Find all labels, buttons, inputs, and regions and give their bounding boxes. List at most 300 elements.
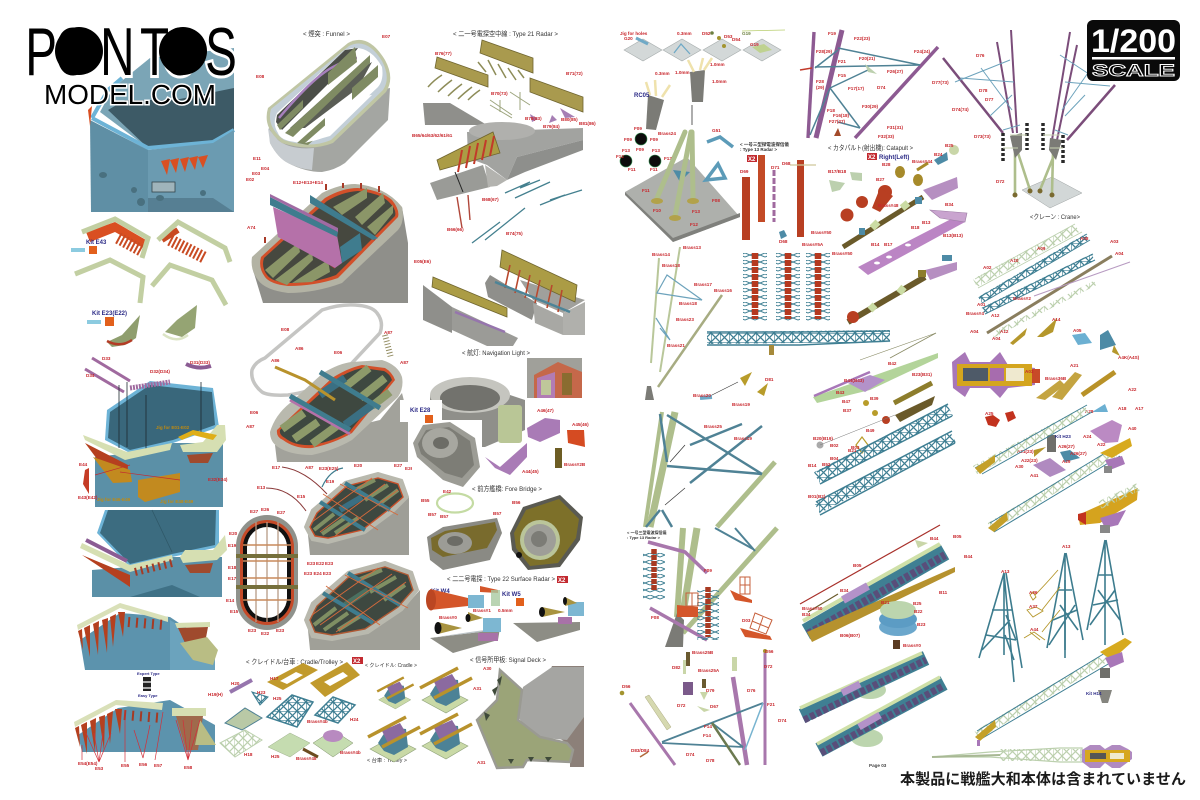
text: cradle and trolley sub labels: < クレイドル: Cradle > [365, 663, 417, 669]
funnel 4: E23 [325, 561, 334, 566]
badge: x2 cradle [352, 657, 363, 665]
panel: central truss pieces: B20(B19) [813, 436, 833, 441]
panel: fore bridge parts: B56 [512, 500, 521, 505]
panel: catapult rail with disk [800, 525, 973, 649]
panel: top centre mast lattice: F27(27) [829, 119, 846, 124]
panel: brass pieces: Brass18 [662, 263, 680, 268]
panel: crane complete lower [975, 638, 1132, 746]
panel: top centre mast lattice: F24(24) [914, 49, 931, 54]
panel: central truss pieces: B39 [870, 396, 879, 401]
panel: crane assembly parts mid [985, 404, 1144, 478]
panel: tripod with tapered parts: 0.3mm [655, 71, 670, 76]
panel: top centre mast lattice: F32(33) [878, 134, 895, 139]
panel: signal deck: A31 [477, 760, 486, 765]
panel: bridge underside labelled: E55 [121, 763, 130, 768]
panel: crane assembly parts mid: A22(23) [1021, 458, 1038, 463]
panel: top centre mast lattice: F15 [838, 73, 846, 78]
panel: crane assembly parts mid: A40 [1128, 426, 1137, 431]
panel: crane boom parts: A10 [1010, 258, 1019, 263]
funnel 3: with plates: E06 [250, 410, 259, 415]
funnel wire labels and arrows: E20 [354, 463, 363, 468]
panel: crane plan view [932, 745, 1132, 768]
panel: catapult rail with disk: B05 [853, 563, 862, 568]
panel: signal deck: A31 [473, 686, 482, 691]
badge: x2 cradle: X2 [353, 659, 361, 665]
panel: type 13 radar parts: D69 [740, 169, 749, 174]
panel: funnel grid plan view: E15 [230, 609, 239, 614]
panel: tripod with tapered parts: F12 [690, 222, 698, 227]
panel: mast lattice large: Brass19 [734, 436, 752, 441]
panel: top centre mast lattice: F19 [828, 31, 836, 36]
panel: bridge assembly with jigs: E43(E42) [78, 495, 98, 500]
panel: crane boom parts: A02 [983, 265, 992, 270]
panel: crane assembly parts mid: A25 [985, 411, 994, 416]
panel: central truss pieces: B02 [830, 443, 839, 448]
panel: crane assembly parts mid: Kit H23 [1055, 434, 1071, 439]
panel: crane boom parts: A05 [1073, 328, 1082, 333]
panel: cradle parts: H25 [273, 696, 282, 701]
panel: tripod with tapered parts: F11 [642, 188, 650, 193]
funnel 2 labels: E04 [261, 166, 270, 171]
panel: tripod with tapered parts: F13 [692, 209, 700, 214]
funnel wire labels and arrows: E27 [394, 463, 403, 468]
panel: crane assembly parts mid: A26(27) [1070, 451, 1087, 456]
funnel ring and ladder: E06 [334, 350, 343, 355]
panel: lower mast parts: D76 [747, 688, 756, 693]
panel: type 22 radar parts: Brass#0 [439, 615, 457, 620]
panel: crane base plan parts: A03 [1025, 369, 1034, 374]
panel: tripod with tapered parts: 1.0mm [712, 79, 727, 84]
panel: tripod with tapered parts: F13 [652, 148, 660, 153]
panel: type 21 radar parts: B78(83) [525, 116, 542, 121]
funnel 1 labels [253, 34, 391, 161]
panel: tripod with tapered parts: RC05 [634, 93, 650, 99]
panel: cradle parts: H18 [244, 752, 253, 757]
panel: catapult rail with disk: B34 [840, 588, 849, 593]
panel: V mast assembly: D72 [996, 179, 1005, 184]
panel: navigation light parts: Brass#2B [564, 462, 586, 467]
funnel 2 labels: E03 [252, 171, 261, 176]
panel: V mast assembly: D77(73) [932, 80, 949, 85]
panel: top centre mast lattice: F16(18) [833, 113, 850, 118]
panel: mast lattice large [645, 402, 775, 527]
title: crane: <クレーン : Crane> [1030, 213, 1080, 221]
panel: tripod with tapered parts: F13 [664, 156, 672, 161]
funnel 4: E22 [316, 561, 325, 566]
panel: bridge underside labelled: E53 [95, 766, 104, 771]
funnel 3: with plates: A87 [305, 465, 314, 470]
panel: type 22 radar parts: Brass#1 [473, 608, 491, 613]
panel: lower mast parts: F14 [704, 724, 712, 729]
panel: crane base plan parts [952, 352, 1137, 400]
panel: bridge underside labelled [74, 700, 216, 771]
panel: bridge assembly with jigs: D33 [102, 356, 111, 361]
panel: catapult parts: Brass#50 [832, 251, 853, 256]
panel: catapult rail with disk: Brass#0 [903, 643, 921, 648]
panel: lower mast parts: D82 [672, 665, 681, 670]
panel: crane assembly parts mid: A26(27) [1058, 444, 1075, 449]
badge: x2 catapult and right/left [867, 153, 909, 161]
panel: tripod with tapered parts: F09 [634, 126, 642, 131]
funnel 2: baffle plates [246, 166, 431, 303]
icon: expert and easy type switch [137, 671, 160, 698]
panel: navigation light parts: A45(46) [572, 422, 589, 427]
panel: bridge assembly with jigs: E44 [79, 462, 88, 467]
panel: bridge assembly with jigs: Jig for E48-E49 [160, 499, 194, 504]
panel: bridge underside [77, 603, 218, 670]
panel: tripod with tapered parts: F12 [616, 154, 624, 159]
panel: type 22 radar parts [426, 586, 584, 653]
panel: navigation light parts [400, 358, 589, 490]
panel: lower mast parts: Brass25B [692, 650, 714, 655]
panel: crane base plan parts: A22 [1128, 387, 1137, 392]
panel: catapult parts: B17/B18 [828, 169, 847, 174]
panel: type 13 radar parts: D71 [771, 165, 780, 170]
panel: type 21 radar parts: B66(66) [447, 227, 464, 232]
panel: catapult rail with disk: B44 [930, 536, 939, 541]
panel: tripod with tapered parts: F08 [712, 198, 720, 203]
panel: tripod with tapered parts: F09 [650, 137, 658, 142]
panel: cradle parts: H23 [257, 690, 266, 695]
funnel 3: with plates: A87 [246, 424, 255, 429]
panel: crane boom parts: A12 [1000, 329, 1009, 334]
panel: crane base plan parts: Brass36B [1045, 376, 1067, 381]
panel: type 21 radar parts: B70(73) [491, 91, 508, 96]
panel: signal deck: A30 [483, 666, 492, 671]
panel: top centre mast lattice [800, 30, 938, 139]
funnel 3: with plates [246, 360, 408, 470]
panel: lower mast parts: Brass25A [698, 668, 720, 673]
panel: funnel grid plan view: E27 [277, 510, 286, 515]
funnel 4 [305, 473, 409, 566]
panel: tripod with tapered parts: F09 [624, 137, 632, 142]
panel: crane boom parts: A03 [1110, 239, 1119, 244]
panel: mast assembly with radars: < 一号三型電波探信儀 [627, 529, 666, 535]
logo: Pontos Model: MODEL.COM [44, 79, 216, 110]
panel: crane towers: A37 [1029, 604, 1038, 609]
panel: crane boom parts: Brass#2 [1013, 296, 1031, 301]
funnel wire labels and arrows: E23(E25) [319, 466, 339, 471]
panel: lower mast parts: D79 [706, 688, 715, 693]
panel: cradle parts: H19(H) [208, 692, 223, 697]
funnel ring and ladder: A86 [271, 358, 280, 363]
panel: tripod with tapered parts: F10 [653, 208, 661, 213]
panel: catapult parts: Brass#50 [811, 230, 832, 235]
funnel wire labels and arrows [257, 463, 414, 511]
panel: central truss pieces: B37 [843, 408, 852, 413]
panel: V mast assembly [932, 30, 1115, 208]
panel: bridge assembly finished [80, 510, 227, 597]
title: type 13 radar: < 一号三型探電波探信儀 [740, 141, 789, 148]
panel: catapult parts: B27 [876, 177, 885, 182]
title: catapult: < カタパルト(射出機): Catapult > [828, 143, 913, 152]
panel: top centre mast lattice: F18 [827, 108, 835, 113]
panel: catapult rail with disk: B06(B07) [840, 633, 860, 638]
panel: bridge assembly with jigs: Jig for E46-E49 [97, 497, 131, 502]
panel: catapult rail with disk: B05 [953, 534, 962, 539]
panel: crane boom parts [966, 224, 1140, 360]
panel: top centre mast lattice: F30(29) [862, 104, 879, 109]
panel: long truss [707, 331, 890, 355]
panel: catapult parts: B25 [945, 143, 954, 148]
panel: crane assembly parts mid: A24 [1083, 434, 1092, 439]
title: cradle and trolley: < クレイドル/台車 : Cradle/Trolley > [246, 657, 343, 666]
panel: funnel grid plan view: E14 [226, 598, 235, 603]
panel: cradle parts: H17 [270, 676, 279, 681]
panel: E43 fin brackets [71, 219, 230, 347]
funnel 2 labels: E12+E13+E14 [293, 180, 323, 185]
panel: crane boom parts: A12 [991, 313, 1000, 318]
panel: type 22 radar parts: 0.5mm [498, 608, 513, 613]
panel: lower mast parts: F14 [703, 733, 711, 738]
panel: central truss pieces: B49 [866, 428, 875, 433]
icon: orange vent teeth [161, 155, 208, 175]
panel: bridge underside labelled: E58 [184, 765, 193, 770]
panel: catapult parts: B28 [882, 162, 891, 167]
panel: type 13 radar parts: X2 [748, 157, 756, 163]
funnel wire labels and arrows: E13 [257, 485, 266, 490]
panel: assembled cradles [368, 668, 472, 762]
panel: crane boom parts: A08 [1080, 236, 1089, 241]
panel: catapult rail with disk: Brass#50 [802, 606, 823, 611]
panel: central truss pieces: B01(B2) [808, 494, 826, 499]
badge: x2 type 22 [557, 576, 568, 584]
funnel 1 labels: E07 [382, 34, 391, 39]
panel: type 21 radar parts: B74(75) [506, 231, 523, 236]
badge: 1/200 scale: SCALE [1092, 61, 1175, 80]
panel: cradle parts: H25 [271, 754, 280, 759]
panel: catapult parts: B13 [922, 220, 931, 225]
panel: crane assembly parts mid: A29 [1062, 459, 1071, 464]
panel: catapult rail with disk: B21 [881, 600, 890, 605]
funnel 2 labels: E05(E6) [414, 259, 431, 264]
panel: fore bridge parts: B57 [493, 511, 502, 516]
panel: V mast assembly: D78 [979, 88, 988, 93]
disclaimer: 本製品に戦艦大和本体は含まれていません [900, 770, 1186, 788]
swatch E43 [89, 246, 97, 254]
title: funnel: < 煙突 : Funnel > [303, 29, 350, 38]
panel: crane towers [979, 540, 1123, 682]
panel: top centre mast lattice: F22(23) [854, 36, 871, 41]
panel: crane assembly parts mid: A30 [1015, 464, 1024, 469]
panel: V mast assembly: D76 [976, 53, 985, 58]
panel: mast assembly with radars [627, 528, 777, 647]
panel: crane assembly parts mid: A21(23) [1017, 449, 1034, 454]
panel: lower mast parts: F21 [767, 702, 775, 707]
panel: lower mast parts: D67 [710, 704, 719, 709]
funnel wire labels and arrows: E15 [297, 494, 306, 499]
panel: funnel grid plan view: E26 [261, 507, 270, 512]
panel: catapult parts: B17 [884, 242, 893, 247]
funnel 2 labels: A74 [247, 225, 256, 230]
panel: fore bridge parts: E42 [443, 489, 452, 494]
panel: crane boom parts: A14 [1052, 317, 1061, 322]
panel: crane towers: A13 [1001, 569, 1010, 574]
panel: funnel grid plan view: E20 [229, 531, 238, 536]
panel: funnel grid plan view: E23 E24 E23 [304, 571, 332, 576]
panel: jig plates row: Jig for holes [620, 31, 648, 36]
panel: brass pieces: Brass17 [694, 282, 712, 287]
panel: catapult rail with disk: B11 [939, 590, 948, 595]
title: type 13 radar [740, 141, 789, 152]
panel: small brass fittings: D81 [765, 377, 774, 382]
panel: catapult rail with disk: B44 [964, 554, 973, 559]
panel: central truss pieces: B52 [822, 462, 831, 467]
panel: bridge assembly with jigs: D31(D33) [190, 360, 210, 365]
panel: catapult rail with disk: B25 [913, 601, 922, 606]
panel: bridge assembly with jigs: D32(D34) [150, 369, 170, 374]
panel: funnel grid plan view: E17 [228, 576, 237, 581]
badge: x2 catapult and right/left: X2 [868, 155, 876, 161]
panel: mast lattice large: Brass25 [704, 424, 722, 429]
panel: bridge underside labelled: E56 [139, 762, 148, 767]
funnel 1 labels: E08 [256, 74, 265, 79]
panel: type 13 radar parts [740, 155, 818, 321]
panel: catapult parts [802, 143, 967, 323]
panel: director tower top view [88, 48, 234, 212]
panel: jig plates row: D53 [724, 34, 733, 39]
panel: catapult parts: B14 [871, 242, 880, 247]
panel: mast assembly with radars: F08 [651, 615, 659, 620]
panel: tripod with tapered parts: 1.0mm [675, 70, 690, 75]
panel: cradle parts: Brass#48 [296, 756, 317, 761]
kit label E43: Kit E43 [86, 240, 107, 246]
panel: funnel grid plan view: E23 [276, 628, 285, 633]
panel: fore bridge parts [421, 489, 583, 570]
panel: crane assembly parts mid: A41 [1030, 473, 1039, 478]
panel: bridge underside labelled: E57 [154, 763, 163, 768]
panel: central truss pieces: B42 [888, 361, 897, 366]
panel: catapult parts: B34 [945, 202, 954, 207]
icon: expert and easy type switch: Easy Type [138, 693, 158, 698]
panel: type 21 radar parts: B68(67) [482, 197, 499, 202]
panel: mast assembly with radars: : Type 13 Radar > [627, 535, 661, 540]
panel: crane towers: A36 [1029, 590, 1038, 595]
panel: small brass fittings [645, 372, 774, 400]
panel: catapult parts: Brass#5A [802, 242, 824, 247]
panel: central truss pieces: B14 [808, 463, 817, 468]
panel: lower mast parts: D78 [706, 758, 715, 763]
title: fore bridge: < 前方艦橋: Fore Bridge > [472, 484, 542, 493]
funnel 2 labels [246, 166, 431, 264]
panel: top centre mast lattice: F31(31) [887, 125, 904, 130]
logo: Pontos Model: PONTOS [25, 15, 237, 90]
panel: small brass fittings: Brass20 [693, 393, 711, 398]
panel: brass pieces: Brass14 [652, 252, 670, 257]
panel: bridge assembly with jigs: D34 [86, 373, 95, 378]
badge: x2 type 22: X2 [558, 578, 566, 584]
panel: cradle parts: H20 [231, 681, 240, 686]
panel: bridge assembly with jigs: E32(E34) [208, 477, 228, 482]
panel: catapult parts: Brass#44 [912, 159, 933, 164]
panel: jig plates row [620, 30, 785, 61]
panel: type 21 radar parts: B79(84) [543, 124, 560, 129]
panel: top centre mast lattice: (29) [816, 85, 825, 90]
panel: funnel grid plan view: E18 [228, 565, 237, 570]
panel: jig plates row: G19 [750, 42, 759, 47]
panel: jig plates row: 0.3mm [677, 31, 692, 36]
panel: lower mast parts: D56 [622, 684, 631, 689]
panel: cradle parts: H24 [350, 717, 359, 722]
title: type 21 radar: < 二一号電探空中線 : Type 21 Radar > [453, 29, 558, 38]
badge: x2 catapult and right/left: Right(Left) [879, 155, 909, 161]
panel: central truss pieces: B03 [851, 445, 860, 450]
logo: Pontos Model: PONTOS [25, 15, 237, 90]
panel: crane complete row [975, 405, 1138, 533]
panel: V mast assembly: D74(74) [952, 107, 969, 112]
panel: central truss pieces: B04 [830, 456, 839, 461]
panel: mast assembly with radars: F09 [704, 568, 712, 573]
panel: central truss pieces: B44(B43) [844, 378, 864, 383]
funnel wire labels and arrows: E17 [272, 465, 281, 470]
funnel ring and ladder: A87 [384, 330, 393, 335]
panel: type 22 radar parts: Kit W4 [431, 589, 450, 595]
panel: top centre mast lattice: D74 [877, 85, 886, 90]
panel: mast assembly with radars: D03 [742, 618, 751, 623]
panel: type 21 radar assembled [423, 250, 585, 346]
panel: central truss pieces: B21 [848, 448, 857, 453]
panel: mast lattice large: Brass19 [732, 402, 750, 407]
panel: lower mast parts: D74 [686, 752, 695, 757]
panel: central truss pieces: B47 [842, 399, 851, 404]
panel: tripod with tapered parts: F09 [636, 147, 644, 152]
panel: tripod with tapered parts: F13 [622, 148, 630, 153]
panel: jig plates row: G19 [742, 31, 751, 36]
panel: type 21 radar parts: B71(72) [566, 71, 583, 76]
panel: tripod with tapered parts: Brass24 [658, 131, 676, 136]
funnel 1 labels: E11 [253, 156, 261, 161]
panel: funnel grid plan view: E19 [228, 543, 237, 548]
panel: central truss pieces: B43 [836, 390, 845, 395]
panel: V mast assembly: D73(73) [974, 134, 991, 139]
panel: catapult rail with disk: B34 [802, 612, 811, 617]
panel: crane base plan parts: A21 [1070, 363, 1079, 368]
panel: crane boom parts: Brass#4 [966, 311, 984, 316]
panel: funnel grid plan view [226, 507, 332, 636]
swatch E23 [105, 317, 114, 326]
panel: lower mast parts: D83/D84 [631, 748, 650, 753]
funnel 5 [305, 562, 420, 650]
panel: fore bridge parts: B55 [421, 498, 430, 503]
panel: type 21 radar parts: B80(85) [561, 117, 578, 122]
panel: central truss pieces [808, 333, 955, 515]
panel: catapult rails assembled [800, 653, 944, 753]
panel: crane towers: A13 [1062, 544, 1071, 549]
panel: lower mast parts [620, 649, 787, 765]
panel: cradle parts: Brass#4b [340, 750, 361, 755]
panel: crane towers: A44 [1030, 627, 1039, 632]
panel: funnel grid plan view: E22 [261, 631, 270, 636]
panel: crane boom parts: A04 [992, 336, 1001, 341]
panel: central truss pieces: B23(B31) [912, 372, 932, 377]
panel: bridge assembly with jigs: Jig for E01-E02 [156, 425, 190, 430]
panel: crane assembly parts mid: A18 [1118, 406, 1127, 411]
panel: tripod with tapered parts [616, 58, 740, 242]
kit label E28: Kit E28 [410, 408, 431, 414]
panel: type 13 radar parts: D68 [782, 161, 791, 166]
page number: Page 03 [869, 763, 887, 768]
badge: 1/200 scale: 1/200 [1091, 23, 1176, 59]
panel: cradle parts: Brass#4b [307, 719, 328, 724]
funnel ring and ladder: A86 [295, 346, 304, 351]
panel: top centre mast lattice: F20(21) [859, 56, 876, 61]
badge: 1/200 scale [1087, 20, 1180, 81]
panel: brass pieces: Brass13 [683, 245, 701, 250]
panel: bridge assembly with jigs [78, 356, 228, 507]
panel: brass pieces [651, 245, 732, 387]
panel: lower mast parts: D74 [778, 718, 787, 723]
kit label E23: Kit E23(E22) [92, 311, 127, 317]
